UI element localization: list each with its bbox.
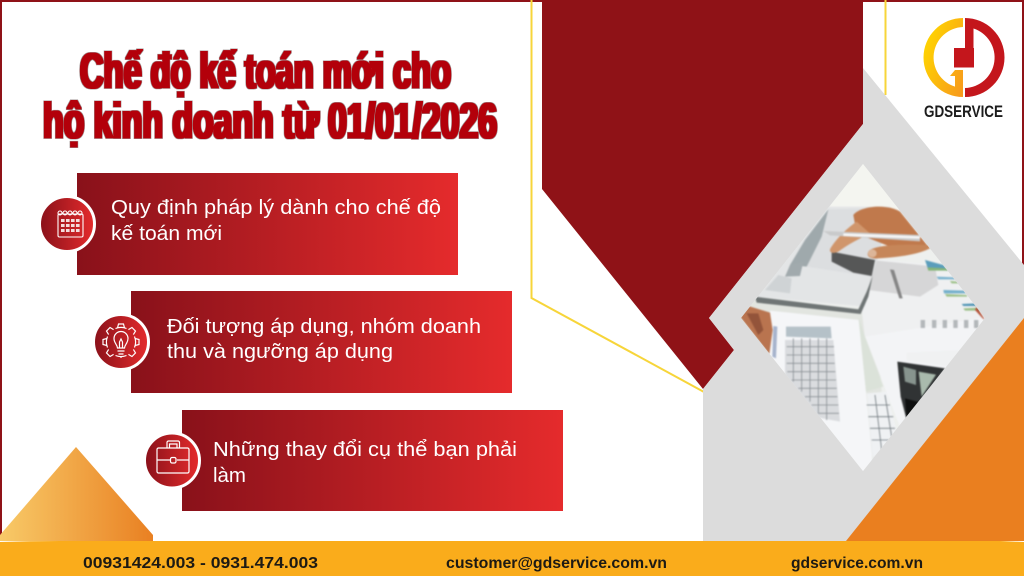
circle badge 2 <box>94 314 148 370</box>
card background 3 <box>182 410 563 511</box>
phone numbers: 00931424.003 - 0931.474.003 <box>83 555 318 572</box>
card text 2: Đối tượng áp dụng, nhóm doanh <box>167 315 481 338</box>
grey diamond background <box>703 68 1024 541</box>
icon: briefcase <box>157 441 189 473</box>
card text 3: làm <box>213 464 246 487</box>
logo yellow G arc <box>924 18 963 97</box>
circle badge 3 <box>144 433 200 488</box>
email: customer@gdservice.com.vn <box>446 555 667 572</box>
circle badge 1 <box>40 196 94 252</box>
panel: required changes <box>144 410 563 511</box>
panel: legal regulations <box>40 173 458 275</box>
logo red square <box>954 48 974 68</box>
orange triangle bottom left <box>0 447 153 541</box>
card background 2 <box>131 291 512 393</box>
footer background <box>0 541 1024 576</box>
icon: calendar <box>58 211 83 237</box>
yellow line right <box>884 0 886 95</box>
dark red pentagon <box>542 0 863 389</box>
logo: GDSERVICE <box>924 18 1004 121</box>
title: hộ kinh doanh từ 01/01/2026 <box>43 93 497 149</box>
icon: gear with light bulb <box>103 324 139 357</box>
yellow line left <box>532 0 704 392</box>
title: Chế độ kế toán mới cho <box>80 43 451 99</box>
panel: applicable subjects <box>94 291 512 393</box>
logo red D arc <box>965 18 1004 97</box>
card background 1 <box>77 173 458 275</box>
title <box>43 43 497 149</box>
footer bar <box>0 541 1024 576</box>
website: gdservice.com.vn <box>791 555 923 572</box>
card text 1: Quy định pháp lý dành cho chế độ <box>111 196 441 219</box>
photo: accounting desk <box>733 160 990 477</box>
card text 1: kế toán mới <box>111 222 222 245</box>
card text 3: Những thay đổi cụ thể bạn phải <box>213 438 517 461</box>
logo wordmark: GDSERVICE <box>924 103 1003 121</box>
card text 2: thu và ngưỡng áp dụng <box>167 340 393 363</box>
orange corner <box>846 318 1024 541</box>
